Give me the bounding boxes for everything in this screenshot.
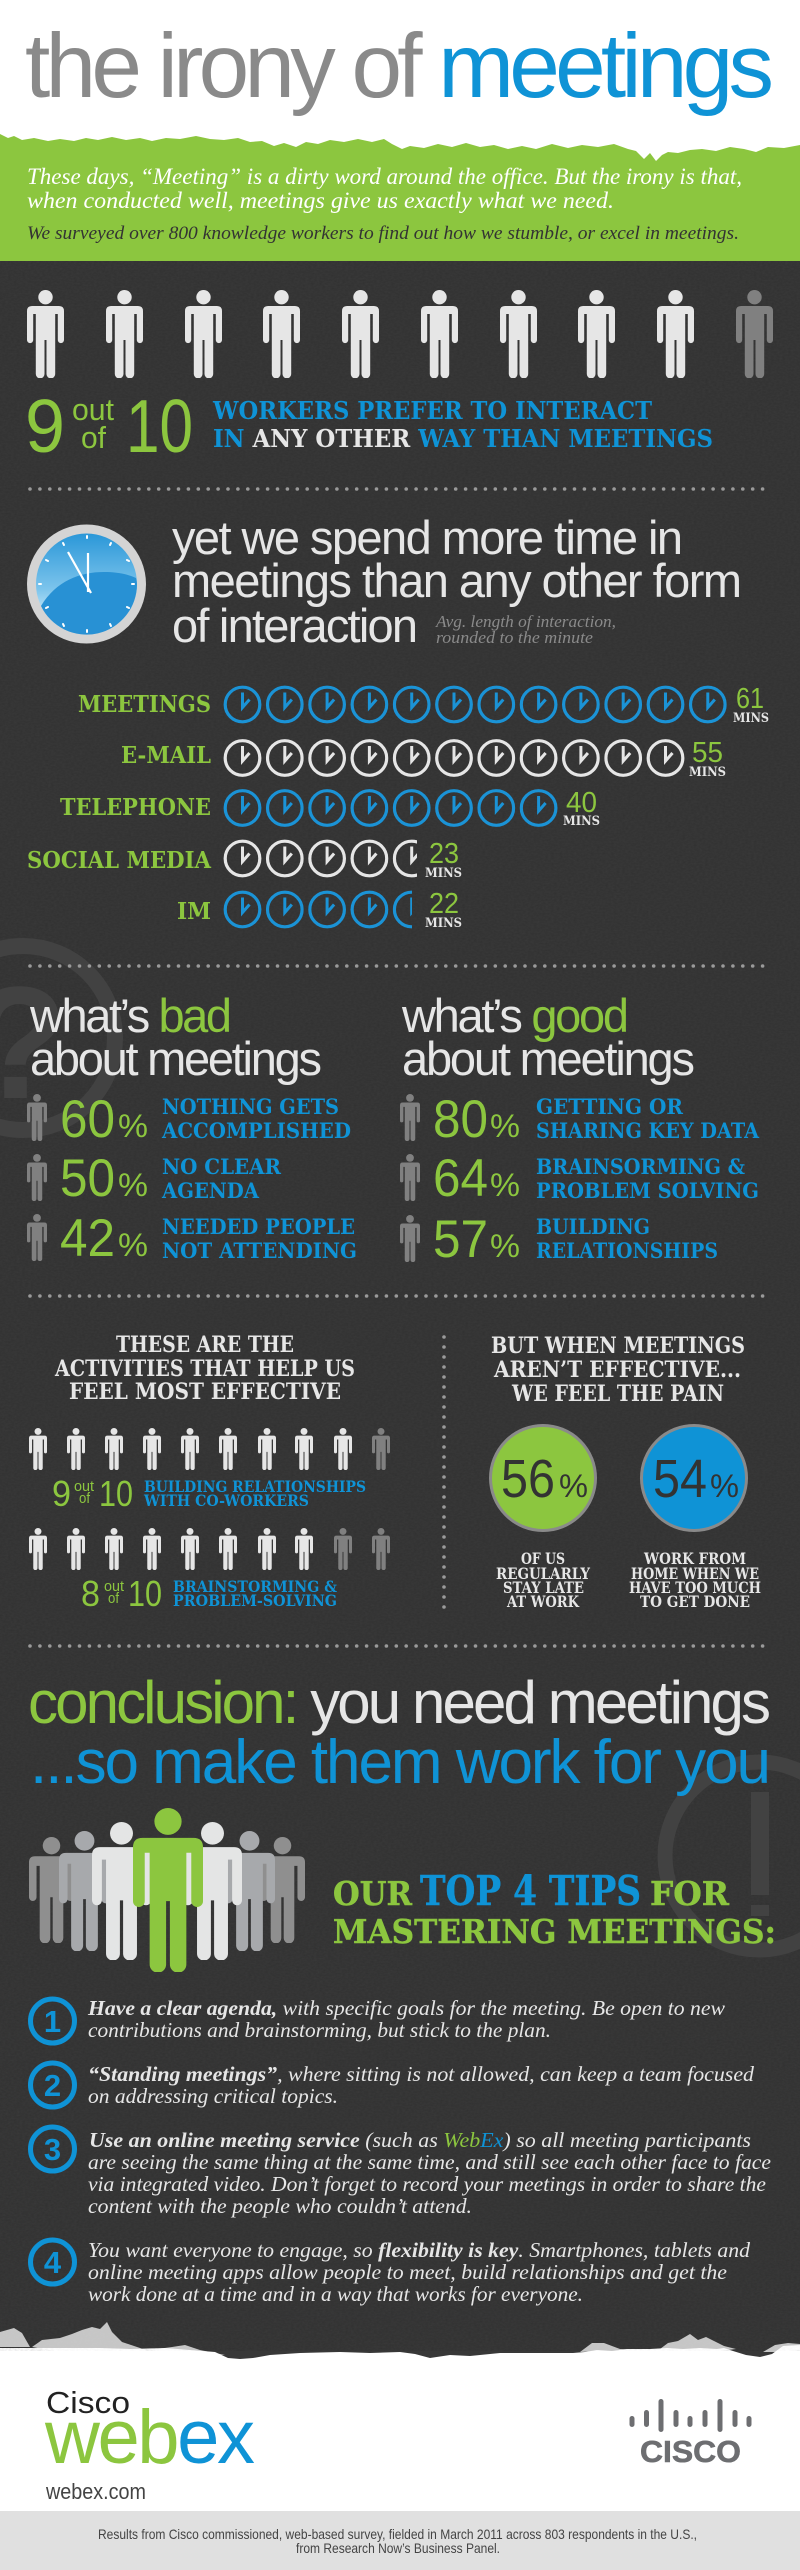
chart row: social media 23 mins xyxy=(28,840,462,878)
heading: top 4 tips: OUR xyxy=(333,1874,413,1913)
intro text: We surveyed over 800 knowledge workers to find out how we stumble, or excel in meetings. xyxy=(27,223,739,244)
stat: 80% getting or sharing key data: % xyxy=(490,1108,520,1144)
stat: 80% getting or sharing key data: 80 xyxy=(433,1090,488,1149)
logo: Cisco xyxy=(630,2399,752,2469)
stat: 9 out of 10: 9 xyxy=(25,384,65,468)
heading: feel the pain xyxy=(491,1333,745,1407)
tip 4: You want everyone to engage, so flexibility is key. Smartphones, tablets and xyxy=(88,2238,751,2262)
note: average length: rounded to the minute xyxy=(436,628,593,647)
stat: 8 out of 10 brainstorming: BRAINSTORMING & xyxy=(173,1577,337,1596)
stat: 9 out of 10 building relationships xyxy=(52,1473,366,1514)
stat circle: 54% work from home: WORK FROM xyxy=(643,1549,746,1568)
tip 3: content with the people who couldn’t attend. xyxy=(88,2194,472,2218)
stat: 9 out of 10: of xyxy=(81,420,106,455)
chart row: IM 22 mins: 22 xyxy=(429,888,459,920)
text: workers prefer to interact: WORKERS PREFER TO INTERACT xyxy=(212,396,652,425)
stat: 9 out of 10 building relationships: out xyxy=(74,1478,95,1495)
heading: activities: FEEL MOST EFFECTIVE xyxy=(69,1379,341,1405)
tip 1 xyxy=(30,1996,725,2043)
stat: 42% needed people not attending: NOT ATTENDING xyxy=(162,1238,357,1263)
panel: feel the pain xyxy=(490,1333,761,1611)
logo: Cisco webex: Cisco xyxy=(46,2385,130,2420)
panel: what's good xyxy=(400,989,760,1269)
heading: yet we spend more time: yet we spend more time in xyxy=(172,511,683,564)
stat: 42% needed people not attending: 42 xyxy=(60,1209,115,1268)
stat: 9 out of 10 xyxy=(25,384,193,468)
heading: conclusion: conclusion: you need meetings xyxy=(28,1669,771,1736)
tip 1: contributions and brainstorming, but stick to the plan. xyxy=(88,2018,551,2042)
stat circle: 56% stay late: STAY LATE xyxy=(503,1578,584,1597)
heading: top 4 tips: TOP 4 TIPS xyxy=(420,1867,641,1915)
heading: top 4 tips: FOR xyxy=(650,1874,730,1913)
stat: 9 out of 10 building relationships: WITH CO-WORKERS xyxy=(143,1491,309,1510)
tip 3: Use an online meeting service (such as WebEx) so all meeting participants xyxy=(89,2128,751,2152)
illustration: group of people xyxy=(29,1808,305,1973)
chart row: e-mail 55 mins: 55 xyxy=(692,737,723,769)
stat circle: 56% stay late xyxy=(490,1426,596,1611)
footer: survey source note xyxy=(0,2511,800,2570)
intro text: These days, “Meeting” is a dirty word around the office. But the irony is that, xyxy=(27,164,742,189)
watermark: question mark xyxy=(0,946,115,1132)
icon: blue wall clock xyxy=(27,524,146,644)
stat circle: 54% work from home: HOME WHEN WE xyxy=(631,1564,759,1583)
heading: what's good: what’s good xyxy=(401,989,629,1042)
stat: 64% brainstorming and problem solving: PROBLEM SOLVING xyxy=(536,1178,759,1203)
chart row: meetings 61 mins: MEETINGS xyxy=(78,691,211,718)
chart row: meetings 61 mins xyxy=(78,683,769,726)
stat: 50% no clear agenda xyxy=(27,1154,282,1201)
chart row: social media 23 mins: SOCIAL MEDIA xyxy=(27,847,212,874)
tip 4: work done at a time and in a way that works for everyone. xyxy=(88,2282,583,2306)
pictogram: 9 of 10 building relationships xyxy=(29,1428,390,1470)
chart row: telephone 40 mins xyxy=(60,787,600,829)
chart row: telephone 40 mins: TELEPHONE xyxy=(60,794,211,821)
tip 3 xyxy=(30,2127,771,2218)
stat circle: 56% stay late: AT WORK xyxy=(506,1592,580,1611)
stat: 42% needed people not attending xyxy=(27,1214,356,1261)
tip 3: 3 xyxy=(44,2132,61,2167)
stat: 60% nothing gets accomplished: 60 xyxy=(60,1090,115,1149)
stat: 80% getting or sharing key data xyxy=(400,1094,760,1141)
stat: 60% nothing gets accomplished xyxy=(27,1094,350,1141)
stat: 9 out of 10 building relationships: 9 xyxy=(52,1473,71,1514)
stat: 42% needed people not attending: % xyxy=(118,1227,148,1263)
stat: 57% building relationships: 57 xyxy=(433,1210,488,1269)
chart row: IM 22 mins: IM xyxy=(177,898,211,925)
heading: activities: THESE ARE THE xyxy=(116,1332,294,1358)
stat: 8 out of 10 brainstorming: PROBLEM-SOLVING xyxy=(173,1591,337,1610)
footer: survey source note: Results from Cisco commissioned, web-based survey, fielded in March 2011 across 803 respondents in the U.S., xyxy=(98,2526,697,2542)
stat: 60% nothing gets accomplished: NOTHING GETS xyxy=(162,1094,339,1119)
logo: Cisco webex: webex xyxy=(44,2395,255,2480)
stat: 8 out of 10 brainstorming: of xyxy=(108,1590,120,1607)
stat: 9 out of 10: out xyxy=(72,392,114,427)
heading: yet we spend more time: of interaction xyxy=(172,599,418,652)
heading: activities xyxy=(54,1332,355,1405)
stat: 9 out of 10 building relationships: of xyxy=(79,1490,91,1507)
note: average length xyxy=(435,612,616,647)
stat: 57% building relationships: RELATIONSHIPS xyxy=(536,1238,718,1263)
stat: 9 out of 10 building relationships: 10 xyxy=(99,1473,133,1514)
stat: 57% building relationships xyxy=(400,1215,717,1262)
intro text xyxy=(27,164,742,244)
intro text: when conducted well, meetings give us exactly what we need. xyxy=(27,188,614,213)
tip 2: 2 xyxy=(44,2068,61,2103)
chart row: IM 22 mins: MINS xyxy=(425,916,462,931)
footer: survey source note: from Research Now’s Business Panel. xyxy=(296,2540,500,2556)
tip 2: on addressing critical topics. xyxy=(88,2084,338,2108)
tip 1: Have a clear agenda, with specific goals for the meeting. Be open to new xyxy=(87,1996,725,2020)
tip 4 xyxy=(30,2238,751,2306)
stat: 50% no clear agenda: AGENDA xyxy=(161,1178,260,1203)
tip 3: are seeing the same thing at the same time, and still see each other face to face xyxy=(88,2150,771,2174)
heading: what's bad xyxy=(29,989,322,1085)
chart row: IM 22 mins xyxy=(178,890,462,928)
tip 2 xyxy=(30,2062,755,2108)
heading: feel the pain: WE FEEL THE PAIN xyxy=(511,1381,724,1407)
heading: conclusion: ...so make them work for you xyxy=(30,1728,771,1797)
pictogram: 9 of 10 workers xyxy=(27,290,773,378)
stat circle: 54% work from home: % xyxy=(710,1468,739,1504)
chart row: meetings 61 mins: 61 xyxy=(736,683,764,715)
stat: 8 out of 10 brainstorming: out xyxy=(104,1578,125,1595)
tip 4: online meeting apps allow people to meet, build relationships and get the xyxy=(88,2260,727,2284)
stat: 80% getting or sharing key data: SHARING KEY DATA xyxy=(536,1118,760,1143)
heading: conclusion xyxy=(28,1669,771,1797)
text: workers prefer to interact: IN ANY OTHER WAY THAN MEETINGS xyxy=(213,424,713,453)
heading: yet we spend more time: meetings than any other form xyxy=(172,554,742,607)
tip 1: 1 xyxy=(44,2004,61,2039)
tip 2: “Standing meetings” , where sitting is not allowed, can keep a team focused xyxy=(88,2062,755,2086)
stat: 57% building relationships: BUILDING xyxy=(536,1214,650,1239)
stat circle: 56% stay late: OF US xyxy=(521,1549,565,1568)
chart row: social media 23 mins: MINS xyxy=(425,866,462,881)
chart row: e-mail 55 mins: E-MAIL xyxy=(121,742,211,769)
heading: what's bad: about meetings xyxy=(30,1032,322,1085)
stat: 50% no clear agenda: NO CLEAR xyxy=(162,1154,282,1179)
chart row: telephone 40 mins: MINS xyxy=(563,814,600,829)
watermark: exclamation mark xyxy=(665,1762,800,1950)
chart row: telephone 40 mins: 40 xyxy=(566,787,597,819)
stat circle: 54% work from home: TO GET DONE xyxy=(640,1592,750,1611)
heading: what's bad: what’s bad xyxy=(29,989,232,1042)
title: the irony of meetings xyxy=(25,16,774,117)
stat: 9 out of 10: 10 xyxy=(126,384,193,468)
tip 4: 4 xyxy=(44,2245,62,2280)
chart row: e-mail 55 mins: MINS xyxy=(689,765,726,780)
note: average length: Avg. length of interaction, xyxy=(435,612,616,631)
stat circle: 56% stay late: REGULARLY xyxy=(496,1564,590,1583)
logo: Cisco: CISCO xyxy=(640,2434,741,2469)
stat circle: 56% stay late: 56 xyxy=(501,1449,555,1509)
text: workers prefer to interact xyxy=(212,396,713,453)
stat: 80% getting or sharing key data: GETTING OR xyxy=(536,1094,684,1119)
logo: Cisco webex: webex.com xyxy=(45,2479,146,2504)
stat circle: 54% work from home: HAVE TOO MUCH xyxy=(629,1578,761,1597)
heading: feel the pain: BUT WHEN MEETINGS xyxy=(491,1333,745,1359)
stat: 50% no clear agenda: 50 xyxy=(60,1149,115,1208)
stat: 8 out of 10 brainstorming: 10 xyxy=(128,1573,162,1614)
stat: 60% nothing gets accomplished: % xyxy=(118,1108,148,1144)
pictogram: 8 of 10 brainstorming xyxy=(29,1528,390,1570)
chart row: meetings 61 mins: MINS xyxy=(733,711,769,726)
chart row: e-mail 55 mins xyxy=(121,737,726,780)
heading: top 4 tips xyxy=(333,1867,776,1951)
stat: 60% nothing gets accomplished: ACCOMPLISHED xyxy=(161,1118,351,1143)
panel: green intro band xyxy=(0,134,800,265)
stat: 64% brainstorming and problem solving: 64 xyxy=(433,1149,488,1208)
stat: 64% brainstorming and problem solving: % xyxy=(490,1167,520,1203)
stat circle: 56% stay late: % xyxy=(559,1468,588,1504)
heading: yet we spend more time xyxy=(172,511,742,652)
heading: what's good xyxy=(401,989,695,1085)
stat: 8 out of 10 brainstorming xyxy=(81,1573,337,1614)
panel: what's bad xyxy=(27,989,357,1268)
stat: 8 out of 10 brainstorming: 8 xyxy=(81,1573,100,1614)
chart row: social media 23 mins: 23 xyxy=(429,838,459,870)
heading: top 4 tips: MASTERING MEETINGS: xyxy=(333,1912,776,1951)
heading: what's good: about meetings xyxy=(402,1032,695,1085)
tip 3: via integrated video. Don’t forget to record your meetings in order to share the xyxy=(88,2172,766,2196)
panel: activities most effective xyxy=(29,1332,390,1614)
stat circle: 54% work from home xyxy=(629,1426,761,1611)
stat: 64% brainstorming and problem solving xyxy=(400,1154,758,1201)
stat: 50% no clear agenda: % xyxy=(118,1167,148,1203)
stat: 57% building relationships: % xyxy=(490,1228,520,1264)
heading: feel the pain: AREN’T EFFECTIVE... xyxy=(493,1357,741,1383)
stat circle: 54% work from home: 54 xyxy=(653,1449,707,1509)
heading: activities: ACTIVITIES THAT HELP US xyxy=(54,1356,355,1382)
stat: 64% brainstorming and problem solving: BRAINSORMING & xyxy=(536,1154,745,1179)
stat: 42% needed people not attending: NEEDED PEOPLE xyxy=(162,1214,355,1239)
stat: 9 out of 10 building relationships: BUILDING RELATIONSHIPS xyxy=(144,1477,366,1496)
